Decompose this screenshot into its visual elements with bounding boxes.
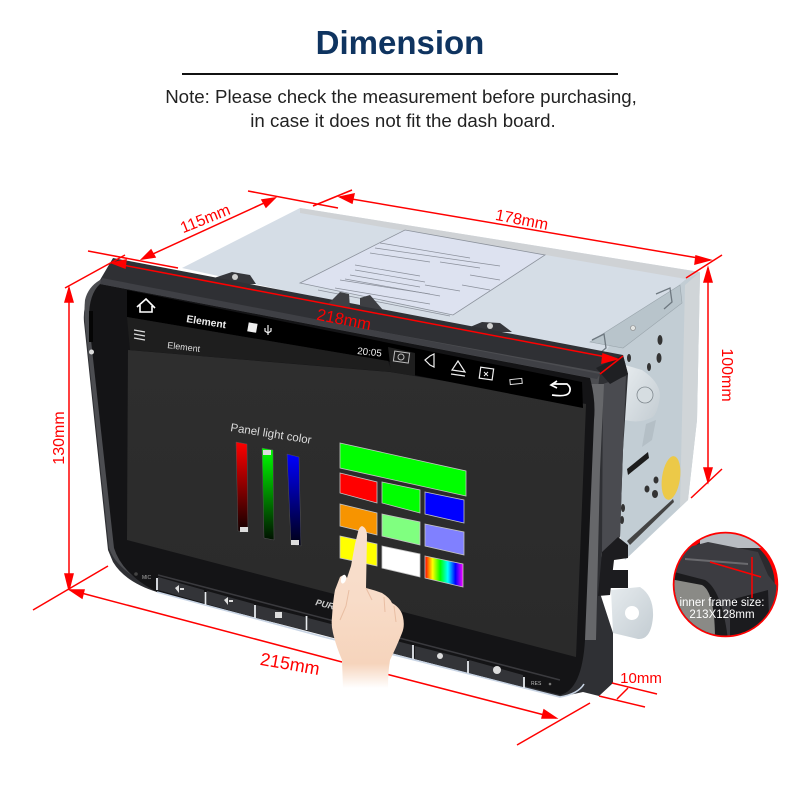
dimension labels <box>51 202 735 687</box>
218mm dimension <box>88 251 623 374</box>
inset detail circle <box>670 530 780 640</box>
outer frame <box>84 258 628 697</box>
dimension labels: 215mm <box>259 649 321 679</box>
lower bezel light edge <box>157 592 584 697</box>
clips on top <box>328 292 383 310</box>
top screw tabs <box>214 272 512 332</box>
black clips <box>598 537 628 596</box>
eject icon <box>451 361 465 376</box>
130mm dimension <box>33 255 125 610</box>
hardware button row: MIC <box>142 575 152 581</box>
second header bar <box>127 317 392 372</box>
note text: Note: Please check the measurement before purchasing, <box>165 86 637 107</box>
dimension labels: 218mm <box>315 306 373 334</box>
status icons <box>247 322 271 335</box>
inset measurement lines <box>710 557 761 598</box>
inner black bezel <box>89 284 594 695</box>
hardware button row: RES <box>531 681 542 687</box>
inset caption: inner frame size: <box>679 597 765 609</box>
title: Dimension <box>316 24 484 61</box>
note text: in case it does not fit the dash board. <box>250 110 556 131</box>
chassis side holes and slot <box>620 335 674 545</box>
hardware button row <box>134 572 560 688</box>
dimension labels: 100mm <box>718 348 735 402</box>
dimension labels: 10mm <box>620 670 662 687</box>
215mm dimension <box>70 590 590 745</box>
colour sliders <box>236 442 301 546</box>
logo on lower bezel: PUR <box>315 597 336 612</box>
top grey strip <box>100 278 600 379</box>
tab hole <box>625 606 639 620</box>
back arrow icon <box>551 381 570 396</box>
colour swatches <box>340 443 466 587</box>
dimension labels: 178mm <box>494 207 550 234</box>
speaker icon <box>425 354 434 367</box>
header title: Element <box>186 314 227 331</box>
camera button tab <box>388 347 415 376</box>
grey bezel rim right <box>584 384 604 640</box>
recent apps icon <box>510 378 522 385</box>
left edge bezel details <box>89 311 94 354</box>
inset caption <box>679 597 765 621</box>
submenu title: Element <box>167 340 201 354</box>
115mm dimension <box>142 191 338 259</box>
metal chassis side <box>600 272 700 560</box>
car stereo device <box>84 208 700 697</box>
camera icon <box>393 351 410 363</box>
panel light label: Panel light color <box>230 422 312 447</box>
metal chassis top plate <box>182 208 700 360</box>
grey bezel rim left and bottom <box>84 280 600 695</box>
chassis fold clips <box>592 288 672 353</box>
100mm dimension <box>686 255 722 498</box>
note text <box>165 86 637 131</box>
red dimension annotations <box>33 190 722 745</box>
10mm dimension <box>599 683 657 707</box>
header bar <box>127 290 583 408</box>
mounting tab <box>611 587 653 639</box>
right side frame panel <box>602 376 626 552</box>
chassis right strip <box>680 272 700 507</box>
clock: 20:05 <box>357 346 383 360</box>
hamburger icon <box>134 330 145 340</box>
top corner piece <box>596 355 628 384</box>
home icon <box>137 299 155 312</box>
screen <box>127 350 586 657</box>
close window icon <box>479 367 494 380</box>
hand pointing at screen <box>332 526 404 688</box>
dimension labels: 130mm <box>51 411 68 465</box>
dimension labels: 115mm <box>178 202 233 237</box>
178mm dimension <box>313 190 710 264</box>
yellow warning sticker <box>659 455 683 501</box>
title underline <box>182 73 618 75</box>
inset caption: 213X128mm <box>689 609 755 621</box>
